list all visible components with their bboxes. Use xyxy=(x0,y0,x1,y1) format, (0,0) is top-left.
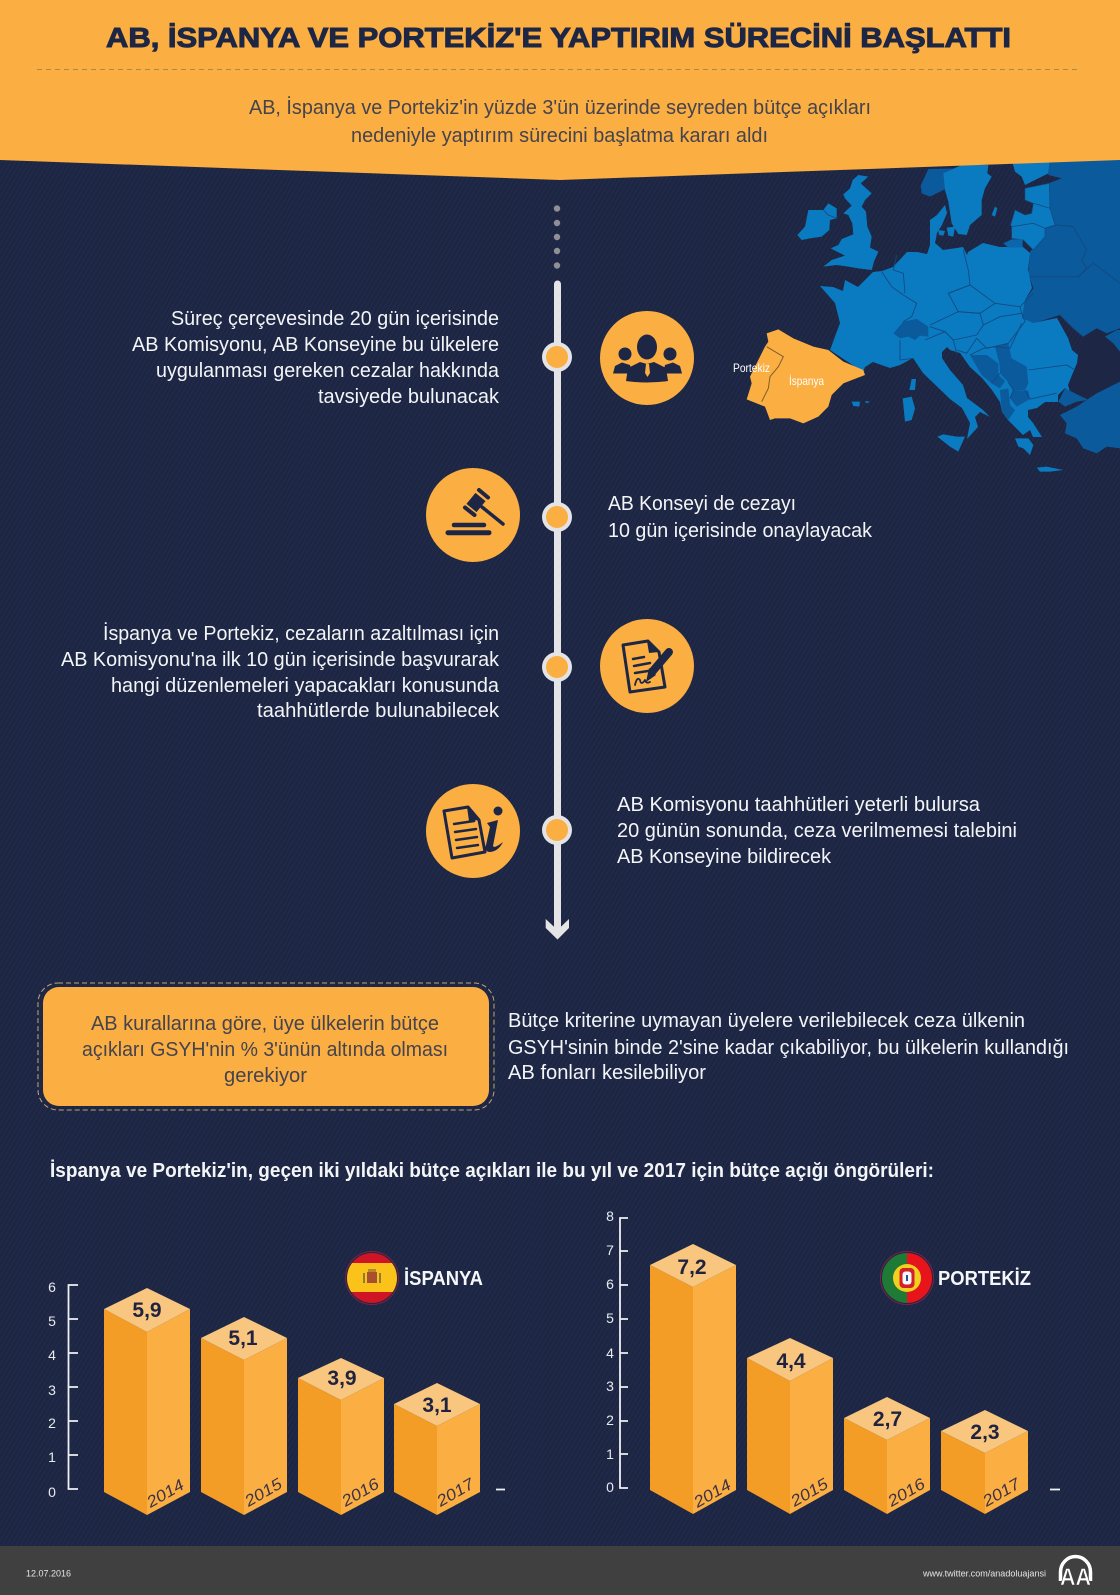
callout: EU rule: gerekiyor xyxy=(224,1065,307,1087)
bar 2014 xyxy=(650,1244,736,1514)
bar 2017 xyxy=(941,1410,1028,1514)
node 4 xyxy=(542,815,572,845)
y axis: 1 xyxy=(606,1446,614,1462)
y axis: 3 xyxy=(606,1378,614,1394)
subtitle xyxy=(249,96,871,147)
map: Scandinavia and Baltics xyxy=(943,160,1120,283)
subtitle: nedeniyle yaptırım sürecini başlatma kararı aldı xyxy=(351,125,768,147)
label: Spain: İSPANYA xyxy=(404,1267,483,1290)
step 1 text: tavsiyede bulunacak xyxy=(318,386,500,408)
y axis: 6 xyxy=(48,1279,56,1295)
map labels: İspanya xyxy=(789,374,824,388)
bar 2015: 2015 xyxy=(241,1476,285,1511)
map labels xyxy=(733,361,824,388)
timeline dots xyxy=(554,205,560,269)
step 2 text: AB Konseyi de cezayı xyxy=(608,493,796,515)
step 3 text: AB Komisyonu'na ilk 10 gün içerisinde başvurarak xyxy=(61,649,500,671)
y axis: 0 xyxy=(606,1479,614,1495)
bar 2015: 5,1 xyxy=(228,1327,258,1350)
step 3 text xyxy=(61,622,500,722)
map: Albania xyxy=(1000,388,1015,420)
bar 2015: 4,4 xyxy=(776,1350,806,1373)
penalty text: Bütçe kriterine uymayan üyelere verilebilecek ceza ülkenin xyxy=(508,1010,1025,1032)
y axis: 5 xyxy=(48,1313,56,1329)
map: Macedonia xyxy=(1010,390,1030,407)
callout: EU rule xyxy=(38,983,494,1110)
bar 2016: 2,7 xyxy=(873,1408,902,1431)
step 3 text: taahhütlerde bulunabilecek xyxy=(257,700,500,722)
header band xyxy=(0,0,1120,180)
map: Black Sea xyxy=(970,315,1120,472)
bar 2015: 2015 xyxy=(787,1476,831,1511)
bar 2014: 7,2 xyxy=(677,1256,707,1279)
map: Mediterranean islands xyxy=(852,319,965,452)
label: Portugal: PORTEKİZ xyxy=(938,1267,1031,1290)
chart heading: İspanya ve Portekiz'in, geçen iki yıldaki bütçe açıkları ile bu yıl ve 2017 için bütçe açığı öngörüleri: xyxy=(50,1159,934,1182)
step 4 text: AB Konseyine bildirecek xyxy=(617,846,832,868)
flag: Portugal xyxy=(880,1252,934,1304)
title: AB, İSPANYA VE PORTEKİZ'E YAPTIRIM SÜRECİNİ BAŞLATTI xyxy=(106,22,1011,53)
map: Britain, Ireland, Norway, Danish islands xyxy=(797,168,960,270)
penalty text: AB fonları kesilebiliyor xyxy=(508,1062,706,1084)
icon: people xyxy=(600,311,694,405)
y axis: 7 xyxy=(606,1242,614,1258)
map: Crimea xyxy=(1105,330,1120,352)
bar 2016: 3,9 xyxy=(327,1367,357,1390)
map: Crete xyxy=(1037,467,1063,472)
map: western and central borders xyxy=(882,250,1033,360)
bar 2014: 2014 xyxy=(143,1477,187,1512)
timeline line xyxy=(554,284,561,932)
step 4 text: 20 günün sonunda, ceza verilmemesi talebini xyxy=(617,820,1017,842)
map: Switzerland xyxy=(893,319,928,340)
y axis: 0 xyxy=(48,1484,56,1500)
y axis: 6 xyxy=(606,1276,614,1292)
step 1 text: uygulanması gereken cezalar hakkında xyxy=(156,360,500,382)
timeline with arrow xyxy=(542,205,572,940)
map: Bosnia xyxy=(970,355,998,383)
bar 2016 xyxy=(298,1358,384,1515)
map: Montenegro xyxy=(992,375,1005,388)
penalty text: GSYH'sinin binde 2'sine kadar çıkabiliyor, bu ülkelerin kullandığı xyxy=(508,1037,1069,1059)
bar 2017: 2017 xyxy=(979,1475,1024,1511)
map of Europe xyxy=(747,160,1120,472)
map: Spain and Portugal xyxy=(747,329,865,423)
y axis: 8 xyxy=(606,1208,614,1224)
node 1 xyxy=(542,342,572,372)
callout: EU rule: açıkları GSYH'nin % 3'ünün altında olması xyxy=(82,1039,448,1061)
y axis: 3 xyxy=(48,1382,56,1398)
footer xyxy=(0,1546,1120,1595)
chart: Spain xyxy=(48,1252,505,1515)
bar 2016 xyxy=(844,1397,930,1514)
y axis: 5 xyxy=(606,1310,614,1326)
step 4 text xyxy=(617,794,1017,868)
map: Peloponnese xyxy=(1015,438,1033,455)
y axis: 2 xyxy=(48,1415,56,1431)
step 1 text: Süreç çerçevesinde 20 gün içerisinde xyxy=(171,308,499,330)
icon: agency logo: AA xyxy=(1060,1564,1091,1591)
subtitle: AB, İspanya ve Portekiz'in yüzde 3'ün üzerinde seyreden bütçe açıkları xyxy=(249,96,871,119)
map: Turkish Thrace xyxy=(1058,388,1088,407)
penalty text xyxy=(508,1010,1069,1084)
chart: Portugal xyxy=(606,1208,1060,1514)
step 2 text xyxy=(608,493,873,542)
step 1 text xyxy=(132,308,500,408)
bar 2016: 2016 xyxy=(338,1476,382,1511)
step 3 text: hangi düzenlemeleri yapacakları konusunda xyxy=(111,675,500,697)
y axis xyxy=(606,1208,628,1495)
bar 2017: 2017 xyxy=(433,1475,478,1511)
map: Serbia xyxy=(995,343,1028,390)
step 1 text: AB Komisyonu, AB Konseyine bu ülkelere xyxy=(132,334,499,356)
bar 2014: 2014 xyxy=(690,1477,734,1512)
date: 12.07.2016 xyxy=(26,1568,71,1580)
y axis xyxy=(48,1279,78,1500)
y axis: 2 xyxy=(606,1412,614,1428)
step 2 text: 10 gün içerisinde onaylayacak xyxy=(608,520,873,542)
arrow head xyxy=(546,919,569,940)
y axis: 1 xyxy=(48,1449,56,1465)
map: Turkey xyxy=(1060,382,1120,453)
step 4 text: AB Komisyonu taahhütleri yeterli bulursa xyxy=(617,794,981,816)
bar 2017: 3,1 xyxy=(422,1394,452,1417)
node 3 xyxy=(542,652,572,682)
bar 2015 xyxy=(201,1317,287,1515)
step 3 icon: document and pen xyxy=(600,619,694,713)
bar 2016: 2016 xyxy=(884,1476,928,1511)
step 4 icon: document and info xyxy=(426,784,520,878)
y axis: 4 xyxy=(48,1347,56,1363)
twitter url: www.twitter.com/anadoluajansi xyxy=(922,1568,1046,1580)
node 2 xyxy=(542,502,572,532)
callout: EU rule: AB kurallarına göre, üye ülkelerin bütçe xyxy=(91,1013,439,1035)
y axis: 4 xyxy=(606,1345,614,1361)
map: EU mainland xyxy=(820,205,1078,439)
bar 2014: 5,9 xyxy=(132,1299,162,1322)
map labels: Portekiz xyxy=(733,361,770,375)
bar 2017 xyxy=(394,1383,480,1515)
flag: Spain xyxy=(345,1252,399,1304)
bar 2017: 2,3 xyxy=(970,1421,1000,1444)
step 2 icon: gavel xyxy=(426,468,520,562)
bar 2014 xyxy=(104,1288,190,1515)
step 3 text: İspanya ve Portekiz, cezaların azaltılması için xyxy=(103,622,499,645)
map: Russia, Belarus, Ukraine xyxy=(1022,160,1120,337)
bar 2015 xyxy=(747,1338,833,1514)
map: Balkan borders xyxy=(970,315,1083,399)
